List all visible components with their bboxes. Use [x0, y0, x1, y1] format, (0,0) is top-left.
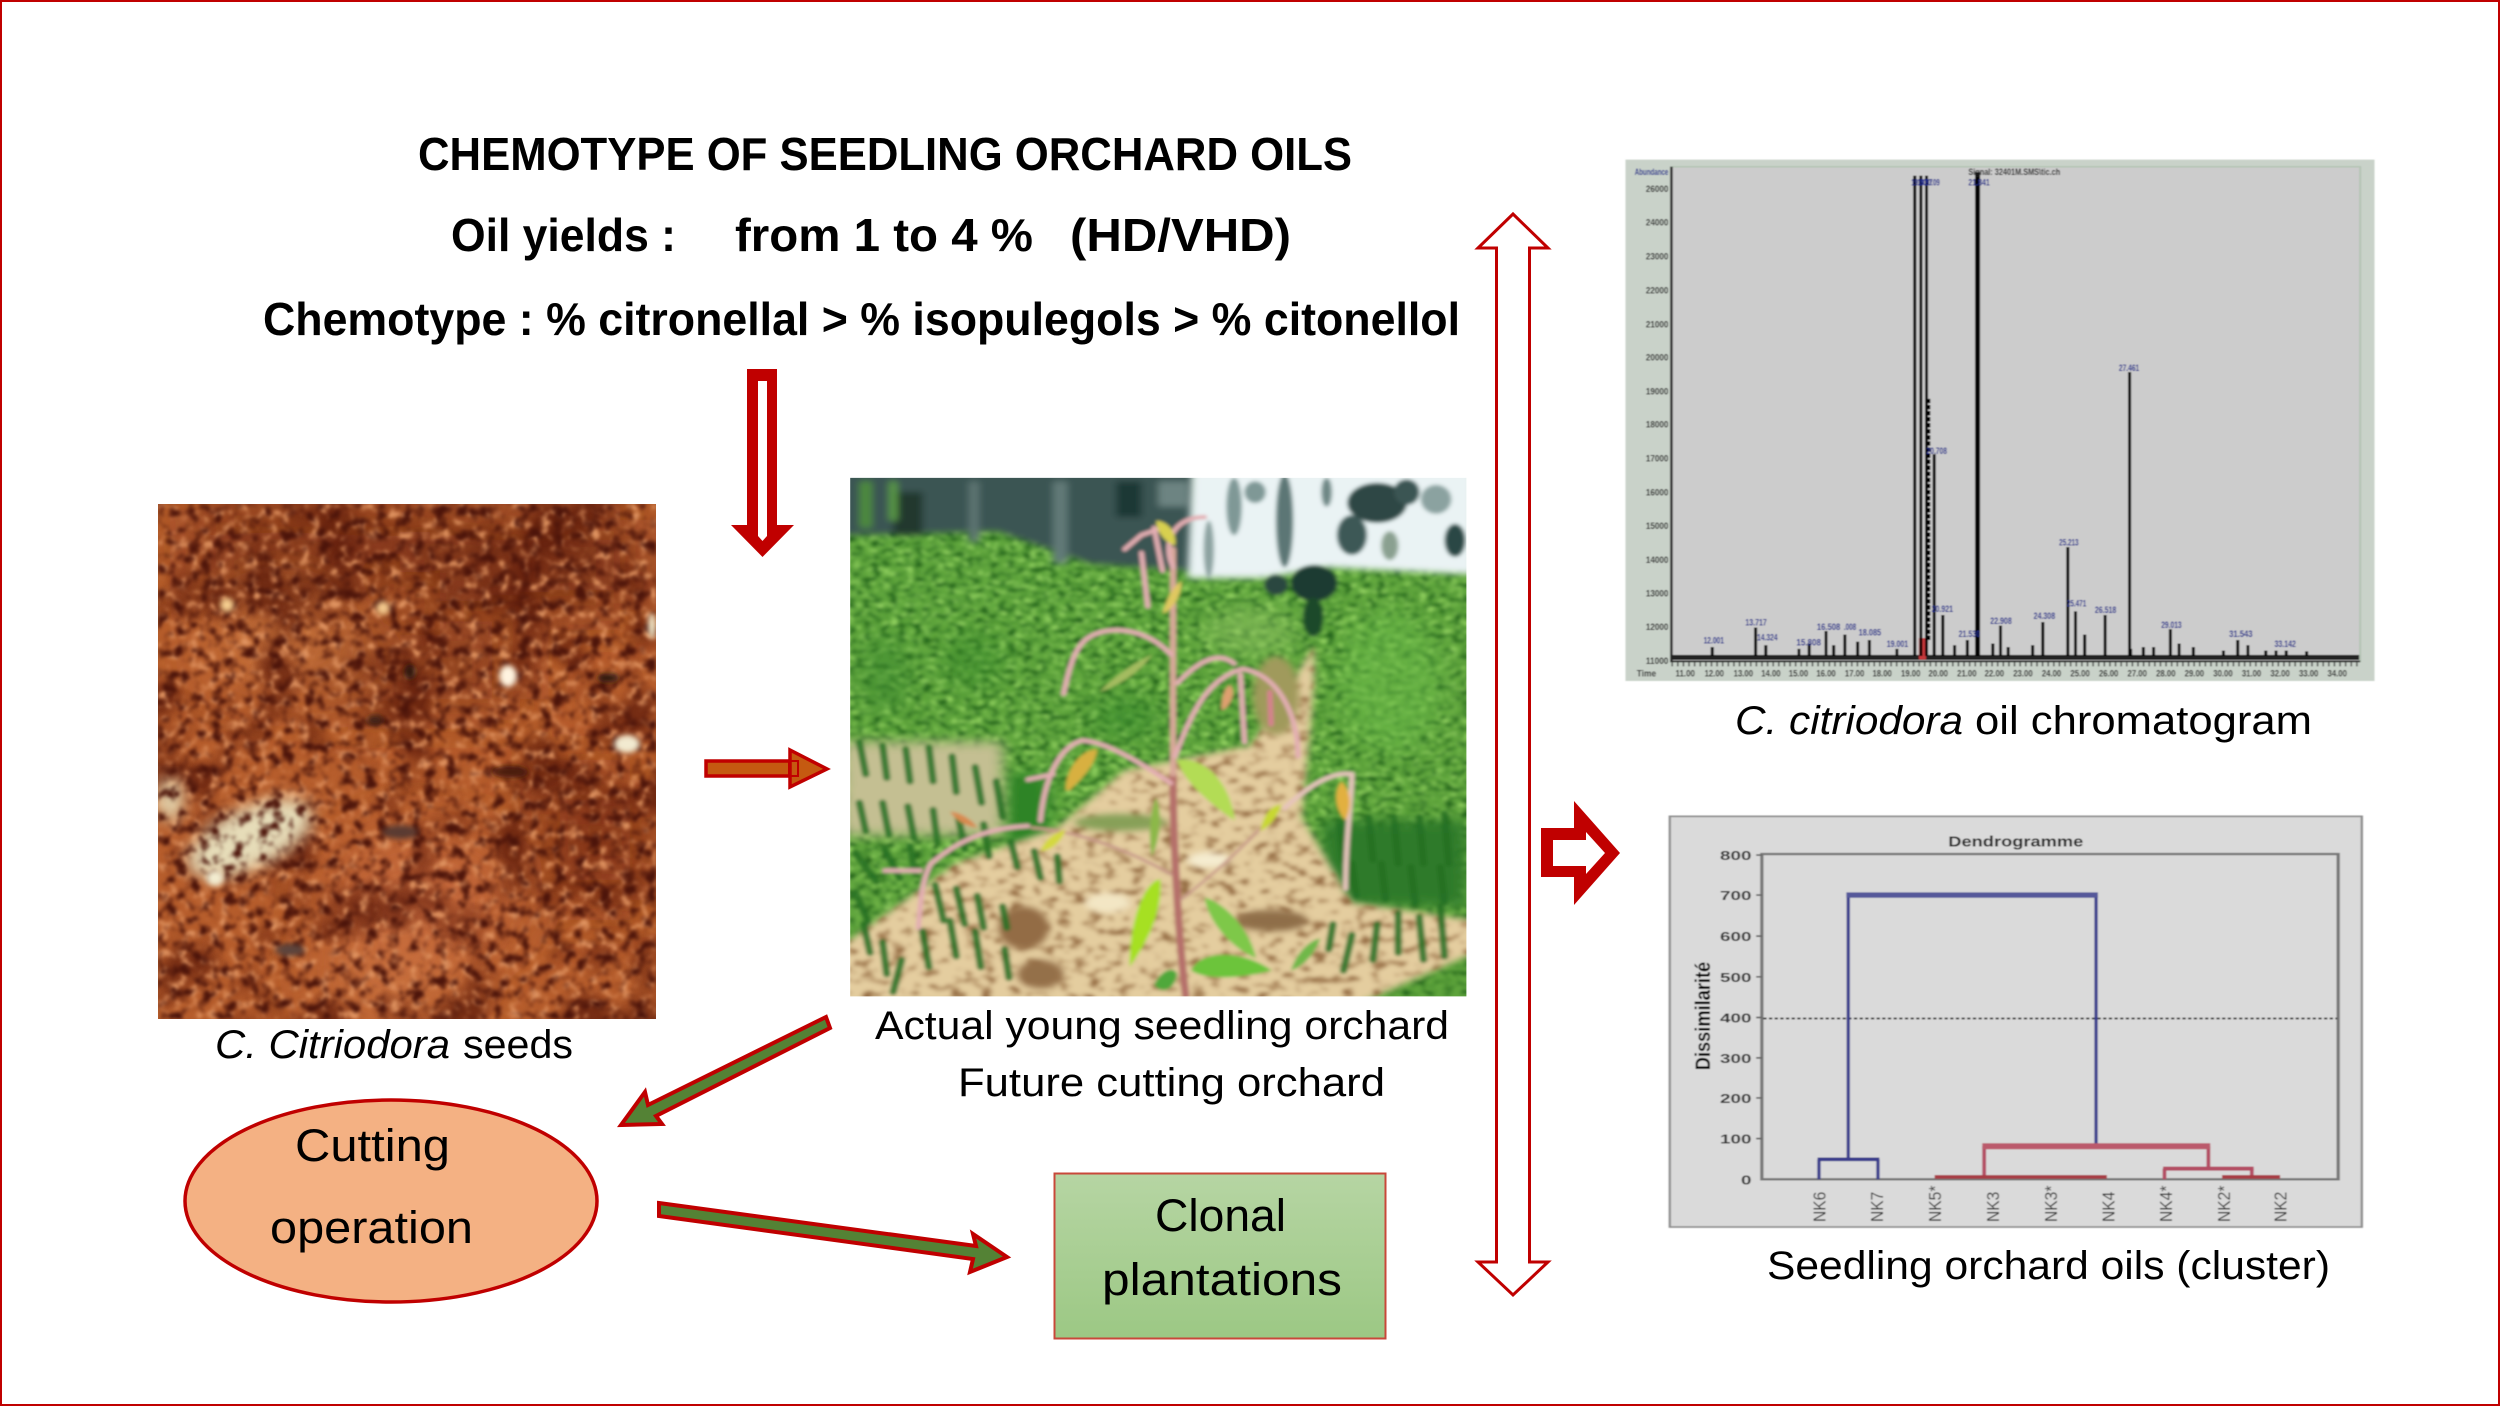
- scale labels: Time: [1637, 667, 1656, 679]
- scale labels: 22.00: [1985, 667, 2004, 679]
- scale labels: 12000: [1646, 621, 1669, 632]
- red cluster: [1935, 1146, 2280, 1179]
- peak labels: 25.471: [2067, 598, 2086, 609]
- y axis labels: [1720, 849, 1751, 1188]
- scale labels: 34.00: [2328, 667, 2347, 679]
- y axis labels: 700: [1720, 889, 1751, 903]
- category labels: NK4: [2098, 1192, 2119, 1222]
- scale labels: [1635, 166, 2347, 679]
- category labels: NK7: [1867, 1192, 1887, 1222]
- seed flecks: [206, 598, 656, 956]
- node: cutting operation: operation: [270, 1202, 473, 1253]
- forest background: [843, 471, 1196, 571]
- node: cutting operation: [185, 1100, 597, 1302]
- caption: chromatogram: oil chromatogram: [1975, 699, 2312, 743]
- sky through trees: [1188, 471, 1474, 578]
- peak labels: 22.908: [1990, 615, 2012, 626]
- peak labels: 27.461: [2119, 362, 2139, 373]
- peak labels: 13.717: [1745, 617, 1767, 628]
- peak labels: 25.213: [2059, 536, 2079, 548]
- chart title: Dendrogramme: [1948, 834, 2083, 850]
- peak labels: 24.308: [2034, 610, 2055, 622]
- category labels: NK2: [2271, 1192, 2291, 1222]
- scale labels: 19.00: [1901, 667, 1921, 679]
- scale labels: 29.00: [2185, 667, 2204, 679]
- scale labels: 12.00: [1705, 667, 1724, 679]
- peaks: [1915, 176, 1927, 656]
- scale labels: 24000: [1646, 217, 1669, 228]
- oil yields line: Oil yields :: [451, 209, 676, 261]
- y axis labels: 200: [1720, 1091, 1751, 1106]
- scale labels: 18.00: [1872, 667, 1892, 679]
- y axis labels: 600: [1720, 930, 1751, 944]
- scale labels: 15000: [1646, 520, 1669, 532]
- scale labels: 11000: [1646, 655, 1669, 667]
- scale labels: 17.00: [1845, 667, 1865, 679]
- y axis labels: 800: [1720, 849, 1751, 863]
- peak labels: 29.013: [2161, 619, 2182, 631]
- peak labels: 16.508: [1817, 621, 1841, 632]
- caption: chromatogram: [1735, 699, 2312, 743]
- scale labels: 30.00: [2213, 667, 2233, 679]
- blue cluster: [1818, 895, 2098, 1179]
- chart: chromatogram: [1626, 160, 2374, 681]
- peak labels: 20.921: [1932, 603, 1953, 615]
- photo: young seedling orchard: [843, 471, 1474, 1003]
- scale labels: 16000: [1646, 486, 1669, 498]
- category labels: NK5*: [1925, 1185, 1945, 1222]
- category labels: NK3: [1983, 1192, 2003, 1222]
- scale labels: 32.00: [2270, 667, 2290, 679]
- title: CHEMOTYPE OF SEEDLING ORCHARD OILS: [418, 128, 1352, 180]
- heading block: [263, 128, 1460, 345]
- category labels: NK6: [1810, 1192, 1830, 1222]
- node: clonal plantations: Clonal: [1155, 1190, 1286, 1241]
- foliage rows: [855, 742, 1449, 992]
- oil yields line: (HD/VHD): [1070, 209, 1291, 261]
- scale labels: 17000: [1646, 452, 1669, 464]
- scale labels: 14000: [1646, 554, 1669, 566]
- foliage texture: [843, 531, 1474, 924]
- caption: dendrogram: Seedling orchard oils (cluster): [1767, 1244, 2330, 1288]
- caption: seedling orchard: Actual young seedling orchard: [875, 1004, 1449, 1048]
- scale labels: 26.00: [2099, 667, 2119, 679]
- caption: seeds: [215, 1023, 573, 1067]
- chemotype line: Chemotype : % citronellal > % isopulegols > % citonellol: [263, 293, 1460, 345]
- axis: [1671, 167, 2360, 661]
- pale seed patch: [156, 778, 324, 894]
- peak labels: 31.543: [2229, 628, 2253, 640]
- peak labels: [1704, 177, 2296, 650]
- peak labels: 12.001: [1704, 635, 1724, 646]
- caption: seedling orchard: Future cutting orchard: [958, 1061, 1385, 1105]
- peak labels: 14.324: [1757, 632, 1778, 643]
- arrow: cutting operation to clonal plantations: [659, 1203, 1007, 1272]
- y axis title: Dissimilarité: [1690, 962, 1715, 1070]
- peak labels: 19.97: [1917, 177, 1933, 188]
- category labels: [1810, 1185, 2291, 1222]
- scale labels: 14.00: [1761, 667, 1781, 679]
- pale gaps between rows: [843, 742, 1003, 835]
- scale labels: 13000: [1646, 587, 1669, 599]
- photo: seeds: [156, 504, 656, 1020]
- baseline: [1671, 655, 2359, 660]
- peak labels: 18.085: [1859, 626, 1881, 638]
- arrow: heading down to photos: [731, 369, 794, 557]
- peak labels: 21.841: [1968, 177, 1990, 188]
- peak labels: 20.708: [1927, 445, 1947, 457]
- scale labels: 20.00: [1929, 667, 1948, 679]
- scale labels: 21.00: [1957, 667, 1977, 679]
- scale labels: 20000: [1646, 352, 1669, 363]
- peak labels: 15.808: [1796, 636, 1821, 648]
- scale labels: Abundance: [1635, 166, 1669, 177]
- ground path: [843, 646, 1474, 1003]
- peak labels: .008: [1844, 621, 1856, 632]
- scale labels: 21000: [1646, 319, 1669, 330]
- chart: dendrogram: [1670, 816, 2362, 1227]
- scale labels: 33.00: [2299, 667, 2319, 679]
- scale labels: 19000: [1646, 385, 1669, 397]
- peak labels: 19.80: [1911, 177, 1927, 188]
- peak labels: 21.530: [1959, 628, 1980, 640]
- scale labels: 26000: [1646, 183, 1669, 194]
- scale labels: 23000: [1646, 251, 1669, 262]
- caption: seedling orchard: [875, 1004, 1449, 1105]
- threshold line: [1763, 1016, 2337, 1022]
- arrow: double headed vertical: [1478, 214, 1548, 1295]
- seedling: [885, 517, 1352, 996]
- node: cutting operation: Cutting: [295, 1120, 450, 1171]
- soil clods: [998, 656, 1308, 989]
- caption: chromatogram: C. citriodora: [1735, 699, 1963, 743]
- node: clonal plantations: [1054, 1174, 1386, 1338]
- y axis labels: 400: [1720, 1011, 1751, 1026]
- arrow: orchard to cutting operation: [621, 1017, 830, 1125]
- scale labels: 16.00: [1816, 667, 1836, 679]
- caption: seeds: C. Citriodora: [215, 1023, 450, 1067]
- y axis labels: 100: [1720, 1132, 1751, 1147]
- scale labels: 27.00: [2128, 667, 2147, 679]
- peak labels: 33.142: [2274, 638, 2296, 650]
- arrow: block right to charts: [1541, 801, 1620, 905]
- scale labels: 11.00: [1676, 667, 1695, 679]
- scale labels: 13.00: [1734, 667, 1753, 679]
- scale labels: 15.00: [1789, 667, 1808, 679]
- category labels: NK4*: [2156, 1185, 2176, 1222]
- arrow: seeds to seedling orchard: [706, 750, 827, 787]
- category labels: NK3*: [2041, 1185, 2061, 1222]
- node: clonal plantations: plantations: [1102, 1254, 1342, 1305]
- scale labels: 31.00: [2242, 667, 2261, 679]
- y axis labels: 0: [1741, 1173, 1751, 1188]
- oil yields line: from 1 to 4 %: [735, 209, 1033, 261]
- y axis labels: 300: [1720, 1051, 1751, 1066]
- scale labels: Signal: 32401M.SMS\tic.ch: [1968, 166, 2060, 177]
- dark bush patches: [859, 606, 1440, 753]
- y axis labels: 500: [1720, 970, 1751, 985]
- scale labels: 23.00: [2013, 667, 2033, 679]
- caption: seeds: seeds: [463, 1023, 573, 1067]
- scale labels: 18000: [1646, 419, 1669, 430]
- peak labels: 19.001: [1887, 638, 1908, 650]
- peak labels: 20.09: [1924, 177, 1940, 188]
- scale labels: 25.00: [2070, 667, 2090, 679]
- oil yields line: [451, 209, 1291, 261]
- scale labels: 28.00: [2156, 667, 2176, 679]
- scale labels: 24.00: [2042, 667, 2061, 679]
- peak labels: 26.518: [2095, 604, 2117, 616]
- scale labels: 22000: [1646, 285, 1669, 296]
- category labels: NK2*: [2214, 1185, 2234, 1222]
